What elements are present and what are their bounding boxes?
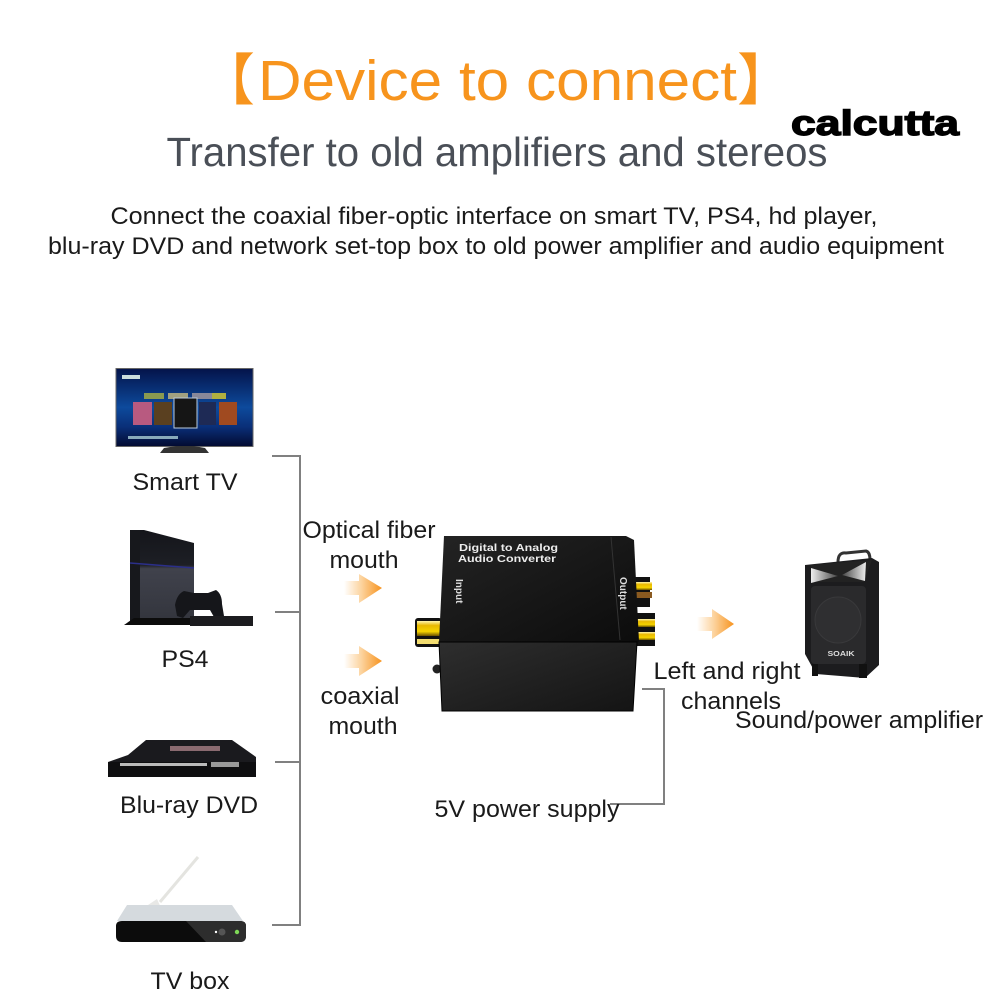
output connectors	[630, 577, 655, 646]
front face	[439, 642, 637, 711]
converter device	[415, 536, 655, 711]
label: 5V power supply: 5V power supply	[434, 796, 620, 823]
label: PS4: PS4	[162, 646, 208, 673]
label: coaxial mouth: mouth	[328, 713, 398, 740]
label: Left and right channels	[654, 658, 801, 715]
label: Sound/power amplifier: Sound/power amplifier	[735, 707, 983, 734]
icon: smart TV	[116, 368, 253, 453]
title	[199, 36, 793, 117]
arrow: optical	[344, 574, 382, 603]
label: Optical fiber mouth: mouth	[330, 547, 398, 574]
label: coaxial mouth	[320, 683, 400, 740]
label: Optical fiber mouth: Optical fiber	[302, 517, 436, 544]
title: 】	[737, 36, 793, 117]
label: Left and right channels: Left and right	[654, 658, 801, 685]
device text: Audio Converter	[458, 554, 556, 565]
label: Optical fiber mouth	[302, 517, 436, 574]
top face	[439, 536, 639, 642]
icon: TV box	[116, 857, 246, 942]
icon: PS4 console	[124, 530, 253, 626]
arrow: coaxial	[344, 646, 382, 676]
description text: Connect the coaxial fiber-optic interface on smart TV, PS4, hd player,	[110, 203, 878, 230]
device text: Digital to Analog	[459, 543, 558, 554]
power cable line	[610, 689, 664, 804]
icon: Blu-ray DVD player	[108, 740, 256, 777]
label: coaxial mouth: coaxial	[320, 683, 400, 710]
device text	[458, 543, 558, 565]
bracket connector	[272, 456, 300, 925]
arrow: to amplifier	[697, 609, 734, 639]
subtitle: Transfer to old amplifiers and stereos	[166, 129, 828, 175]
title: Device to connect	[258, 49, 737, 113]
label: TV box: TV box	[150, 968, 230, 995]
output label: Output	[617, 577, 628, 610]
input label: Input	[453, 579, 464, 604]
description text	[48, 203, 944, 260]
description text: blu-ray DVD and network set-top box to old power amplifier and audio equipment	[48, 233, 944, 260]
title: 【	[199, 36, 255, 117]
icon: speaker: SOAIK	[828, 651, 854, 658]
watermark: calcutta: calcutta	[791, 104, 960, 143]
icon: speaker	[805, 551, 879, 678]
label: Left and right channels: channels	[681, 688, 781, 715]
label: Smart TV: Smart TV	[132, 469, 238, 496]
input connector	[415, 618, 442, 674]
label: Blu-ray DVD: Blu-ray DVD	[120, 792, 258, 819]
